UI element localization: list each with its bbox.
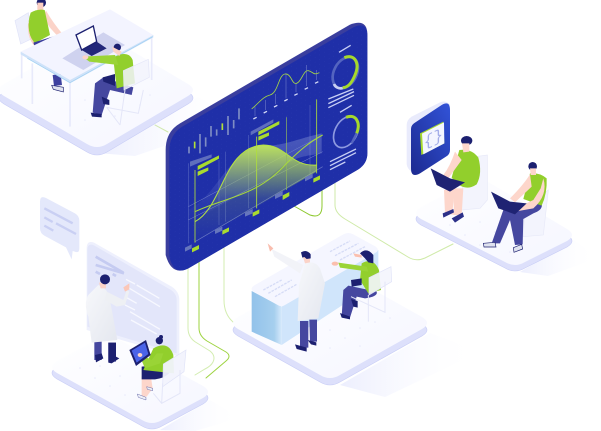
monitor frame: [166, 23, 367, 271]
scientist at board: [86, 274, 129, 363]
speech bubble: [40, 197, 79, 259]
code icon card: {}: [424, 126, 443, 153]
laptop: [76, 26, 107, 56]
main chart grid: [188, 99, 323, 243]
axis labels: [185, 174, 320, 252]
woman with laptop: [431, 136, 480, 223]
platform: centre lab: [233, 268, 480, 397]
donut gauge 2: [328, 112, 364, 152]
line chart: [252, 65, 319, 119]
scene: right coding: [407, 102, 548, 252]
chair: [163, 350, 186, 387]
gauge 1 text lines: [328, 45, 354, 108]
scene: centre lab: [252, 233, 392, 352]
table: [21, 9, 153, 127]
seated man in green shirt: [82, 44, 135, 117]
chair: [369, 267, 392, 295]
gauge 2 text lines: [330, 105, 356, 170]
seated man in green: [28, 0, 63, 92]
platform: top-left meeting: [0, 33, 240, 156]
seated woman: [332, 250, 392, 322]
chair behind seated man: [15, 13, 33, 44]
scene: bottom-left review: [40, 197, 186, 403]
scientist pointing: [268, 243, 325, 352]
floor dots: [329, 317, 391, 349]
folding chair: [107, 59, 149, 125]
floor dots: [79, 365, 126, 396]
man with laptop: [483, 162, 547, 252]
connector lines: [155, 125, 453, 378]
man chair: [523, 190, 548, 237]
donut gauge 1: [328, 53, 363, 93]
monitor dashboard: [166, 23, 367, 271]
lab desk: [252, 233, 378, 345]
woman chair: [462, 155, 487, 210]
platform: right coding: [416, 179, 598, 276]
scene: top-left meeting people and table: [15, 0, 153, 127]
floor dots: [449, 221, 511, 253]
info board: [87, 242, 179, 357]
platform: bottom-left review: [52, 336, 240, 431]
bar sparkline: [189, 108, 239, 153]
woman with tablet: [129, 335, 186, 403]
chart headings: [190, 119, 279, 176]
code icon card: [407, 102, 450, 175]
floor dots: [69, 94, 151, 121]
